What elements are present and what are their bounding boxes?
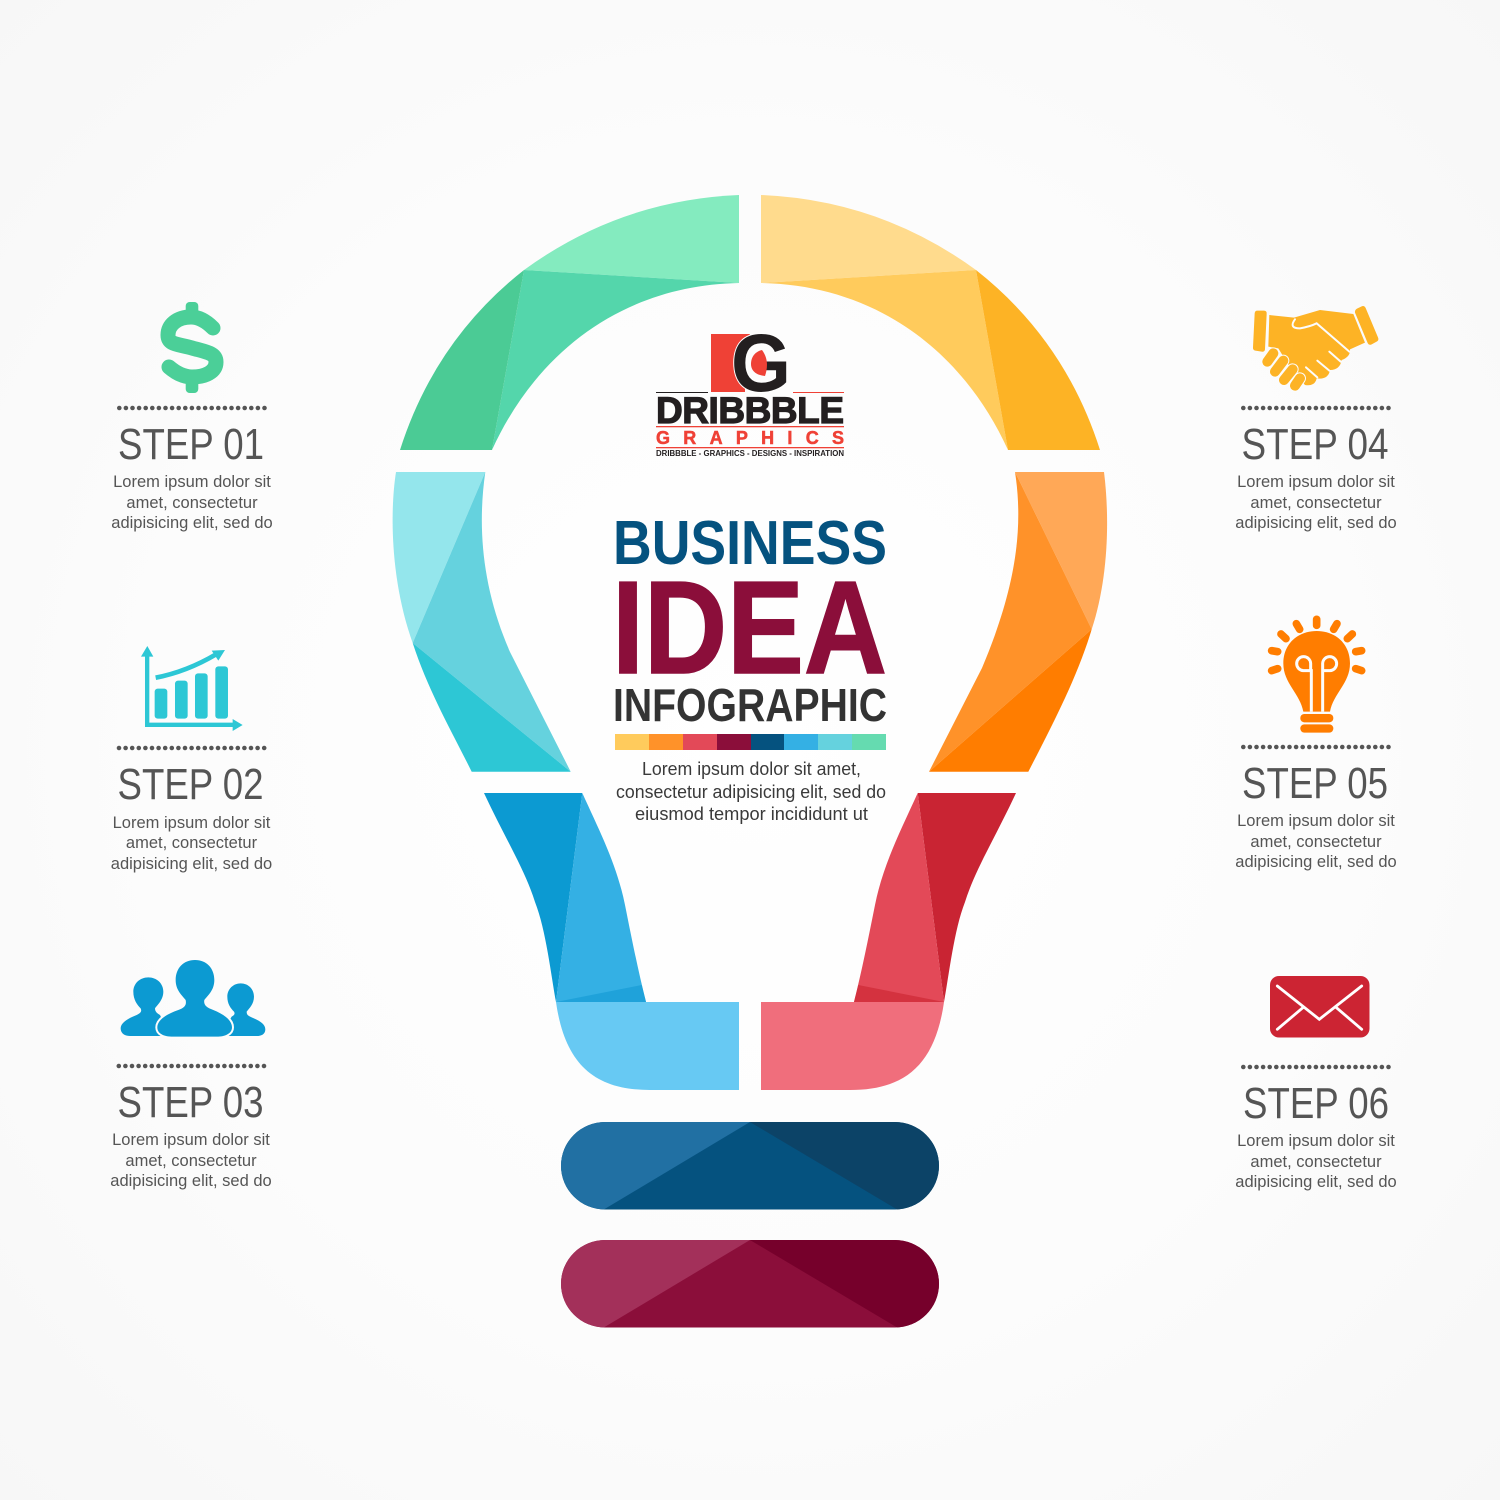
centre description: Lorem ipsum dolor sit amet,: [642, 758, 861, 779]
step 05 text: adipisicing elit, sed do: [1235, 853, 1397, 871]
colour strip: [615, 734, 886, 750]
step 03 text: adipisicing elit, sed do: [110, 1172, 272, 1190]
centre description: eiusmod tempor incididunt ut: [635, 803, 868, 824]
logo: Dribbble Graphics: [656, 318, 844, 458]
step 06 text: Lorem ipsum dolor sit: [1237, 1132, 1395, 1150]
step 03: [110, 960, 272, 1190]
step 04: [1235, 306, 1397, 532]
bulb segment: middle left cyan: [393, 472, 571, 772]
step 06 heading: STEP 06: [1243, 1079, 1389, 1128]
icon: growth chart: [141, 646, 243, 731]
centre description: [616, 758, 886, 824]
bulb base: maroon bar: [561, 1240, 939, 1328]
logo rule lines: [656, 392, 844, 448]
step 02 text: adipisicing elit, sed do: [111, 855, 272, 873]
step 06: [1235, 976, 1397, 1191]
step 02 text: [111, 814, 272, 873]
bulb segment: lower right red: [854, 793, 1016, 1002]
lightbulb graphic: [393, 195, 1107, 1328]
step 01 text: amet, consectetur: [126, 494, 258, 512]
icon: light bulb: [1272, 619, 1362, 733]
logo tagline: DRIBBBLE - GRAPHICS - DESIGNS - INSPIRATION: [656, 449, 844, 458]
step 04 heading: STEP 04: [1242, 420, 1388, 469]
step 04 text: Lorem ipsum dolor sit: [1237, 473, 1395, 491]
step 05 text: [1235, 812, 1397, 871]
step 05 heading: STEP 05: [1242, 759, 1388, 808]
step 05: [1235, 619, 1397, 871]
title line: business: BUSINESS: [613, 509, 887, 578]
bulb base: blue bar: [561, 1122, 939, 1210]
step 03 heading: STEP 03: [118, 1078, 264, 1127]
bulb segment: top right yellow: [761, 195, 1100, 450]
step 02 text: Lorem ipsum dolor sit: [113, 814, 271, 832]
icon: envelope: [1270, 976, 1370, 1038]
step 01 text: [111, 473, 273, 532]
bulb segment: top left green: [400, 195, 739, 450]
step 04 text: amet, consectetur: [1250, 494, 1382, 512]
title line: idea: IDEA: [612, 554, 887, 701]
bulb segment: bottom right pink: [761, 1002, 944, 1090]
title: [612, 509, 887, 731]
bulb segment: lower left blue: [484, 793, 646, 1002]
logo subtitle: GRAPHICS: [656, 428, 844, 448]
step 03 text: [110, 1131, 272, 1190]
step 04 text: adipisicing elit, sed do: [1235, 514, 1397, 532]
centre description: consectetur adipisicing elit, sed do: [616, 781, 886, 802]
step 01: [111, 302, 273, 532]
step 06 text: amet, consectetur: [1250, 1153, 1382, 1171]
step 05 text: Lorem ipsum dolor sit: [1237, 812, 1395, 830]
step 01 text: Lorem ipsum dolor sit: [113, 473, 271, 491]
icon: handshake: [1253, 306, 1378, 386]
step 03 text: amet, consectetur: [125, 1152, 257, 1170]
step 01 text: adipisicing elit, sed do: [111, 514, 273, 532]
bulb segment: middle right orange: [929, 472, 1107, 772]
logo name: DRIBBBLE: [656, 390, 844, 431]
logo mark: G: [731, 318, 791, 409]
step 03 text: Lorem ipsum dolor sit: [112, 1131, 270, 1149]
step 06 text: [1235, 1132, 1397, 1191]
bulb segment: bottom left light blue: [556, 1002, 739, 1090]
step 01 heading: STEP 01: [118, 420, 264, 469]
icon: group of people: [121, 960, 265, 1037]
step 02: [111, 646, 272, 873]
icon: dollar sign: [168, 302, 216, 393]
step 02 heading: STEP 02: [118, 760, 264, 809]
step 05 text: amet, consectetur: [1250, 833, 1382, 851]
step 04 text: [1235, 473, 1397, 532]
step 06 text: adipisicing elit, sed do: [1235, 1173, 1397, 1191]
step 02 text: amet, consectetur: [126, 834, 258, 852]
title line: infographic: INFOGRAPHIC: [613, 679, 887, 731]
